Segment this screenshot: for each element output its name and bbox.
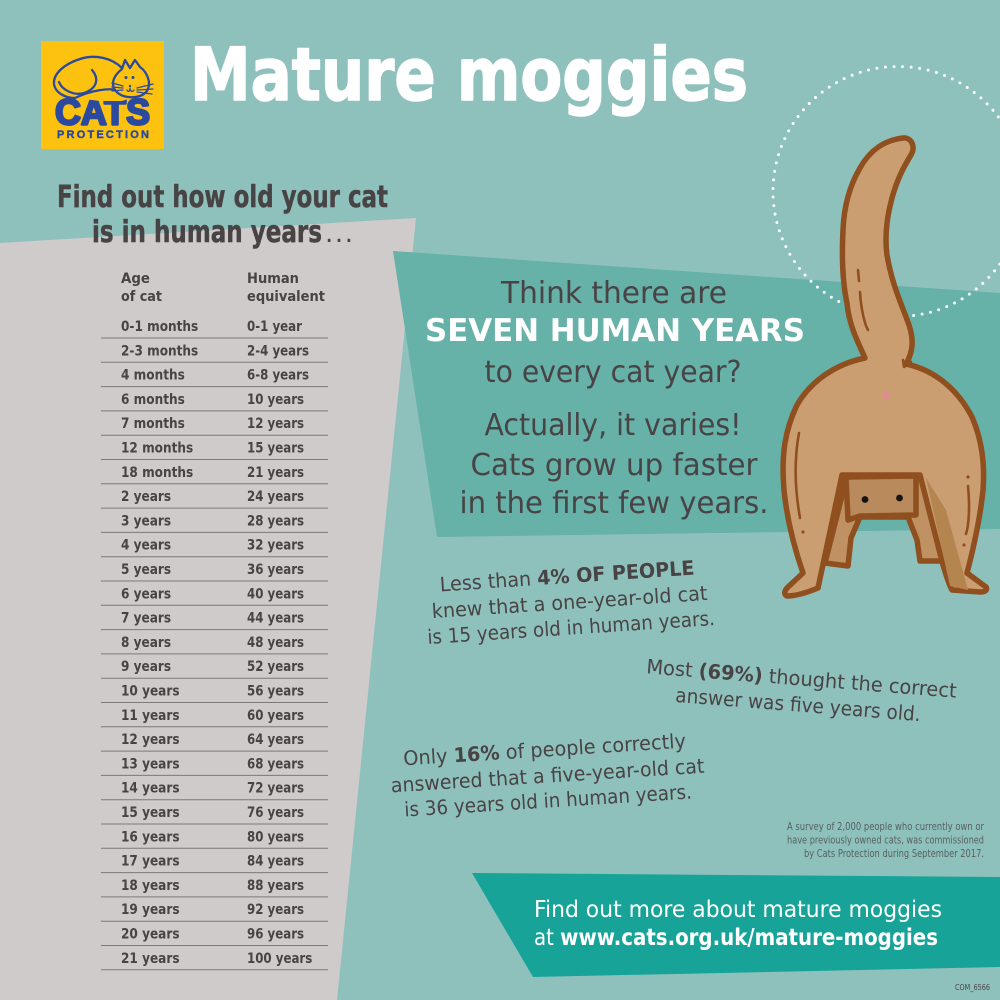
column: age of cat: 0-1 months	[121, 319, 198, 335]
column: age of cat: 9 years	[121, 659, 171, 676]
column: human equivalent: 80 years	[247, 829, 304, 846]
column: human equivalent: 15 years	[247, 440, 304, 457]
column: human equivalent: 52 years	[247, 659, 304, 676]
column: age of cat: 20 years	[121, 927, 180, 943]
callout: seven human years: to every cat year?	[484, 355, 742, 390]
column: human equivalent: 2-4 years	[247, 343, 309, 360]
table: cat age to human years	[101, 270, 328, 970]
column: age of cat: 21 years	[121, 951, 180, 967]
panel: teal callout background	[393, 251, 1000, 537]
reference code: COM_6566	[955, 983, 990, 992]
callout: seven human years	[425, 276, 805, 521]
column: human equivalent: 60 years	[247, 708, 304, 724]
column: age of cat: 17 years	[121, 854, 180, 870]
column: human equivalent: 21 years	[247, 465, 304, 481]
column: human equivalent: 72 years	[247, 781, 304, 797]
column: human equivalent	[247, 319, 312, 967]
stat: 69%: answer was five years old.	[674, 683, 922, 726]
stat: 4% of people: is 15 years old in human years.	[427, 606, 716, 649]
call to action text: Find out more about mature moggies	[534, 897, 942, 923]
callout: seven human years: Think there are	[500, 276, 727, 311]
column: age of cat: 6 months	[121, 392, 185, 408]
callout: seven human years: SEVEN HUMAN YEARS	[425, 313, 805, 349]
cat fur lines	[796, 270, 969, 534]
icon: cat eyes	[124, 76, 134, 87]
callout: seven human years: Cats grow up faster	[470, 448, 758, 483]
callout: seven human years: Actually, it varies!	[484, 408, 742, 443]
column: human equivalent: 88 years	[247, 878, 304, 894]
column: age of cat: 18 months	[121, 465, 193, 481]
column: human equivalent: 64 years	[247, 732, 304, 748]
column headers: Age	[121, 270, 150, 287]
column: human equivalent: 44 years	[247, 611, 304, 627]
stat: 4% of people	[427, 556, 716, 649]
table heading: ...	[325, 219, 353, 249]
logo: Cats Protection	[41, 41, 164, 149]
column: age of cat: 7 years	[121, 611, 171, 627]
column headers	[121, 270, 325, 305]
panel: grey table background	[0, 218, 416, 1000]
title: Mature moggies	[190, 33, 748, 118]
table heading	[57, 180, 388, 250]
column: age of cat: 13 years	[121, 756, 180, 773]
stat: 4% of people: Less than 4% OF PEOPLE	[439, 556, 695, 596]
column: age of cat: 14 years	[121, 781, 180, 797]
column: age of cat: 2-3 months	[121, 343, 198, 360]
column: age of cat: 4 years	[121, 538, 171, 554]
column: age of cat: 3 years	[121, 513, 171, 530]
column: human equivalent: 6-8 years	[247, 368, 309, 384]
column: human equivalent: 28 years	[247, 513, 304, 530]
column: human equivalent: 10 years	[247, 392, 304, 408]
column: age of cat: 8 years	[121, 635, 171, 651]
cat feet dots	[862, 495, 903, 503]
column: human equivalent: 48 years	[247, 635, 304, 651]
column: age of cat: 12 years	[121, 732, 180, 748]
column: age of cat: 5 years	[121, 562, 171, 578]
column: human equivalent: 56 years	[247, 683, 304, 700]
column: age of cat: 15 years	[121, 805, 180, 821]
cat fur specks	[801, 475, 970, 547]
column: age of cat: 7 months	[121, 416, 185, 433]
column: human equivalent: 84 years	[247, 854, 304, 870]
stat: 4% of people: knew that a one-year-old cat	[431, 581, 708, 623]
cat underside opening	[846, 476, 916, 520]
column: age of cat	[121, 319, 198, 967]
column: human equivalent: 92 years	[247, 902, 304, 919]
cat nose-like mark	[883, 391, 890, 399]
column: age of cat: 4 months	[121, 368, 185, 384]
column: age of cat: 11 years	[121, 708, 180, 724]
column: human equivalent: 0-1 year	[247, 319, 302, 335]
column: age of cat: 6 years	[121, 586, 171, 603]
call to action text	[534, 897, 942, 951]
column headers: Human	[247, 270, 299, 287]
column: human equivalent: 100 years	[247, 951, 312, 967]
column: age of cat: 16 years	[121, 829, 180, 846]
stat: 16%: Only 16% of people correctly	[403, 729, 687, 770]
column: human equivalent: 32 years	[247, 538, 304, 554]
column: human equivalent: 68 years	[247, 756, 304, 773]
column: age of cat: 10 years	[121, 684, 180, 700]
callout: seven human years: in the first few years.	[460, 486, 768, 521]
table rules	[101, 338, 328, 970]
column: human equivalent: 76 years	[247, 805, 304, 821]
cat body and tail	[783, 138, 987, 596]
survey footnote	[787, 821, 985, 860]
stat: 16%: is 36 years old in human years.	[404, 779, 693, 822]
table heading: is in human years	[92, 215, 322, 250]
column: age of cat: 18 years	[121, 878, 180, 894]
column: human equivalent: 12 years	[247, 416, 304, 433]
logo subline: PROTECTION	[57, 129, 149, 141]
column: age of cat: 2 years	[121, 489, 171, 505]
column: age of cat: 12 months	[121, 441, 193, 457]
column headers: equivalent	[247, 288, 325, 305]
column: human equivalent: 96 years	[247, 926, 304, 943]
cat leg shading	[926, 478, 968, 590]
call to action text: at www.cats.org.uk/mature-moggies	[534, 925, 938, 951]
stat: 69%: Most (69%) thought the correct	[646, 654, 958, 703]
stat: 16%: answered that a five-year-old cat	[390, 754, 705, 797]
column headers: of cat	[121, 288, 162, 305]
logo wordmark: CATS	[55, 92, 150, 132]
stat: 16%	[390, 729, 705, 822]
icon: sleeping cat outline	[54, 57, 153, 101]
column: human equivalent: 40 years	[247, 586, 304, 603]
panel: call to action band	[472, 873, 1000, 977]
dotted circle	[773, 66, 1000, 316]
illustration: cat from behind	[783, 138, 987, 596]
table heading: Find out how old your cat	[57, 180, 388, 215]
column: human equivalent: 24 years	[247, 489, 304, 505]
column: human equivalent: 36 years	[247, 562, 304, 578]
stat: 69%	[646, 654, 958, 726]
column: age of cat: 19 years	[121, 902, 180, 919]
cat hind legs	[825, 478, 944, 566]
